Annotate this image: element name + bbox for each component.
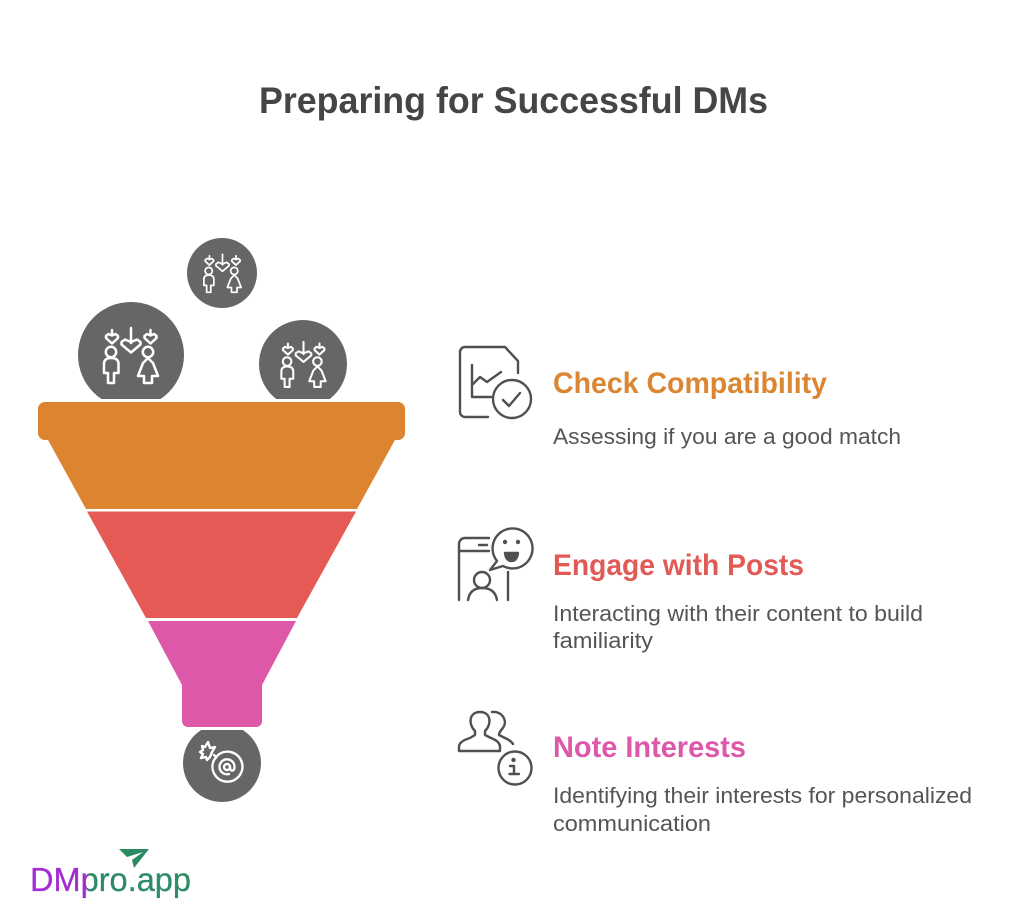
title: Preparing for Successful DMs xyxy=(259,80,768,121)
heading: Engage with Posts xyxy=(553,549,804,582)
item: Engage with Posts xyxy=(459,528,923,653)
funnel tier: red xyxy=(87,512,356,618)
icon: bomb with at sign xyxy=(200,742,242,782)
item: Note Interests xyxy=(459,712,972,836)
circle: target icon xyxy=(183,724,261,802)
logo wordmark: DMpro.app xyxy=(30,861,191,898)
item: Check Compatibility xyxy=(460,347,901,449)
description: Assessing if you are a good match xyxy=(553,424,901,449)
funnel tier: pink xyxy=(148,621,296,727)
heading: Check Compatibility xyxy=(553,367,828,400)
description: Interacting with their content to build xyxy=(553,601,923,626)
circle: large couple icon xyxy=(78,302,184,408)
funnel tier: orange xyxy=(38,402,405,509)
logo: DMpro.app xyxy=(30,849,191,898)
circle: medium couple icon xyxy=(259,320,347,399)
description: familiarity xyxy=(553,628,654,653)
heading: Note Interests xyxy=(553,731,746,764)
funnel diagram xyxy=(38,238,405,802)
description: communication xyxy=(553,811,711,836)
icon: document chart with check xyxy=(460,347,531,418)
icon: two people with info badge xyxy=(459,712,532,784)
circle: small couple icon xyxy=(187,238,257,308)
description: Identifying their interests for personalized xyxy=(553,783,972,808)
icon: paper plane xyxy=(119,849,149,868)
icon: phone with smiling speech bubble xyxy=(459,528,533,600)
